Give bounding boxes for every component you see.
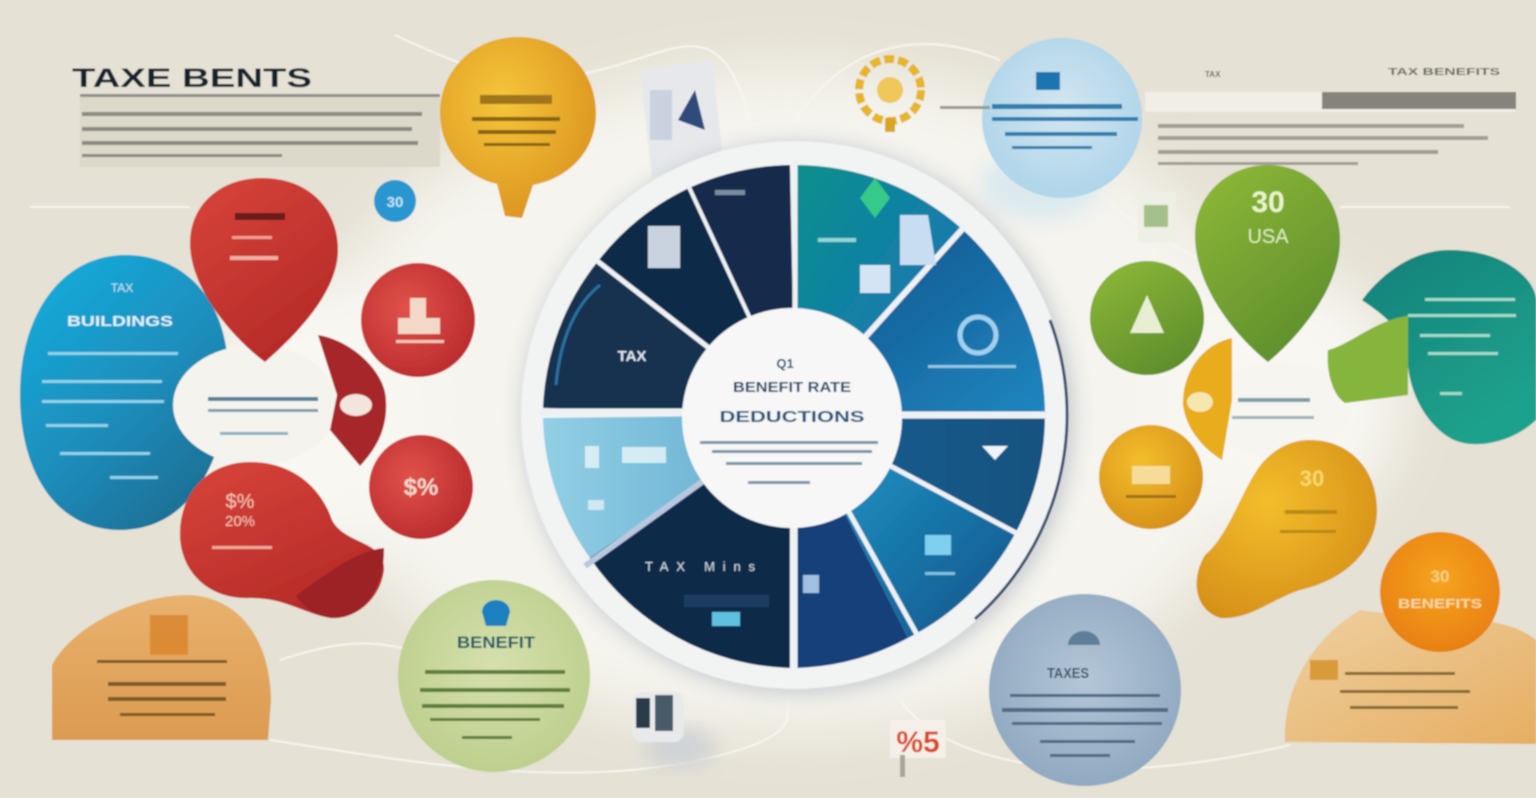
bubble: yellow lower right: 30	[1300, 466, 1324, 491]
icon: red bottom badge	[890, 720, 946, 777]
intro text block	[80, 94, 440, 167]
bubble: cyan left: BUILDINGS	[67, 313, 173, 330]
wheel rim	[521, 141, 1069, 689]
circle: orange: BENEFITS	[1398, 596, 1482, 611]
wedge icons and labels	[556, 178, 1016, 626]
circle: orange: 30	[1431, 567, 1449, 586]
panel: orange bottom left	[52, 595, 271, 740]
circle: red bottom	[369, 435, 473, 539]
header: top right: TAX	[1205, 70, 1221, 79]
icon: small blue badge	[374, 180, 416, 222]
shape: yellow ribbon	[1183, 338, 1232, 460]
bubble: red teardrop	[190, 178, 338, 362]
title: TAXE BENTS	[72, 63, 312, 93]
bubble: yellow top	[440, 37, 596, 218]
wedge: navy upper left	[598, 188, 795, 415]
circle: red bottom: $%	[404, 474, 438, 501]
wedge: blue upper right	[795, 229, 1045, 415]
header: top right	[1145, 67, 1516, 165]
wedge icons and labels: TAX Mins	[645, 559, 756, 574]
wedge: navy top	[689, 165, 795, 415]
circle: amber	[1099, 425, 1203, 529]
bubble: yellow lower right	[1197, 440, 1377, 618]
bubble: teal right	[1362, 250, 1536, 444]
icon: small blue badge: 30	[387, 194, 403, 211]
center hub: Q1	[776, 356, 794, 371]
bubble: light green bottom	[398, 580, 590, 772]
bubble: light blue top	[940, 38, 1142, 220]
bubble: red lower left	[180, 462, 384, 618]
icon: red bottom badge: %5	[896, 726, 940, 759]
header: top right: TAX BENEFITS	[1388, 67, 1501, 78]
shape: dark red ribbon	[318, 335, 386, 466]
bubble: white center right	[1210, 362, 1350, 458]
wheel	[521, 141, 1074, 694]
wedge: navy left	[543, 261, 795, 415]
wedge: teal top right	[795, 165, 962, 415]
wedge: navy bottom left	[590, 415, 790, 668]
icon: document top	[640, 60, 722, 178]
icon: yellow emblem	[859, 59, 921, 132]
center hub	[682, 308, 902, 528]
bubble: slate bottom right: TAXES	[1047, 665, 1089, 682]
bubble: white center left	[173, 345, 337, 465]
circle: red top	[361, 263, 475, 377]
icon: small clipboard	[1138, 192, 1176, 242]
center hub: DEDUCTIONS	[720, 409, 865, 426]
wedge: bright blue lower right	[795, 415, 1016, 638]
panel: orange bottom right	[1285, 610, 1536, 744]
bubble: green teardrop: 30	[1251, 186, 1285, 219]
bubble: cyan left	[20, 255, 228, 530]
bubble: slate bottom right	[989, 594, 1181, 786]
bubble: cyan left: TAX	[111, 281, 133, 295]
circle: green	[1090, 261, 1204, 375]
wedge: light blue left	[543, 415, 795, 558]
wedge icons and labels: TAX	[618, 348, 646, 365]
circle: orange	[1380, 532, 1500, 652]
bubble: light green bottom: BENEFIT	[457, 633, 536, 652]
bubble: red lower left: 20%	[225, 513, 255, 530]
square: green tile	[1328, 316, 1408, 403]
icon: bottom scanner	[632, 692, 716, 768]
bubble: green teardrop	[1195, 165, 1340, 362]
bubble: red lower left: $%	[226, 491, 255, 513]
wedge: blue right	[795, 415, 1045, 532]
center hub: BENEFIT RATE	[733, 379, 851, 396]
bubble: green teardrop: USA	[1247, 226, 1289, 248]
wedge: dark blue bottom	[795, 415, 908, 668]
